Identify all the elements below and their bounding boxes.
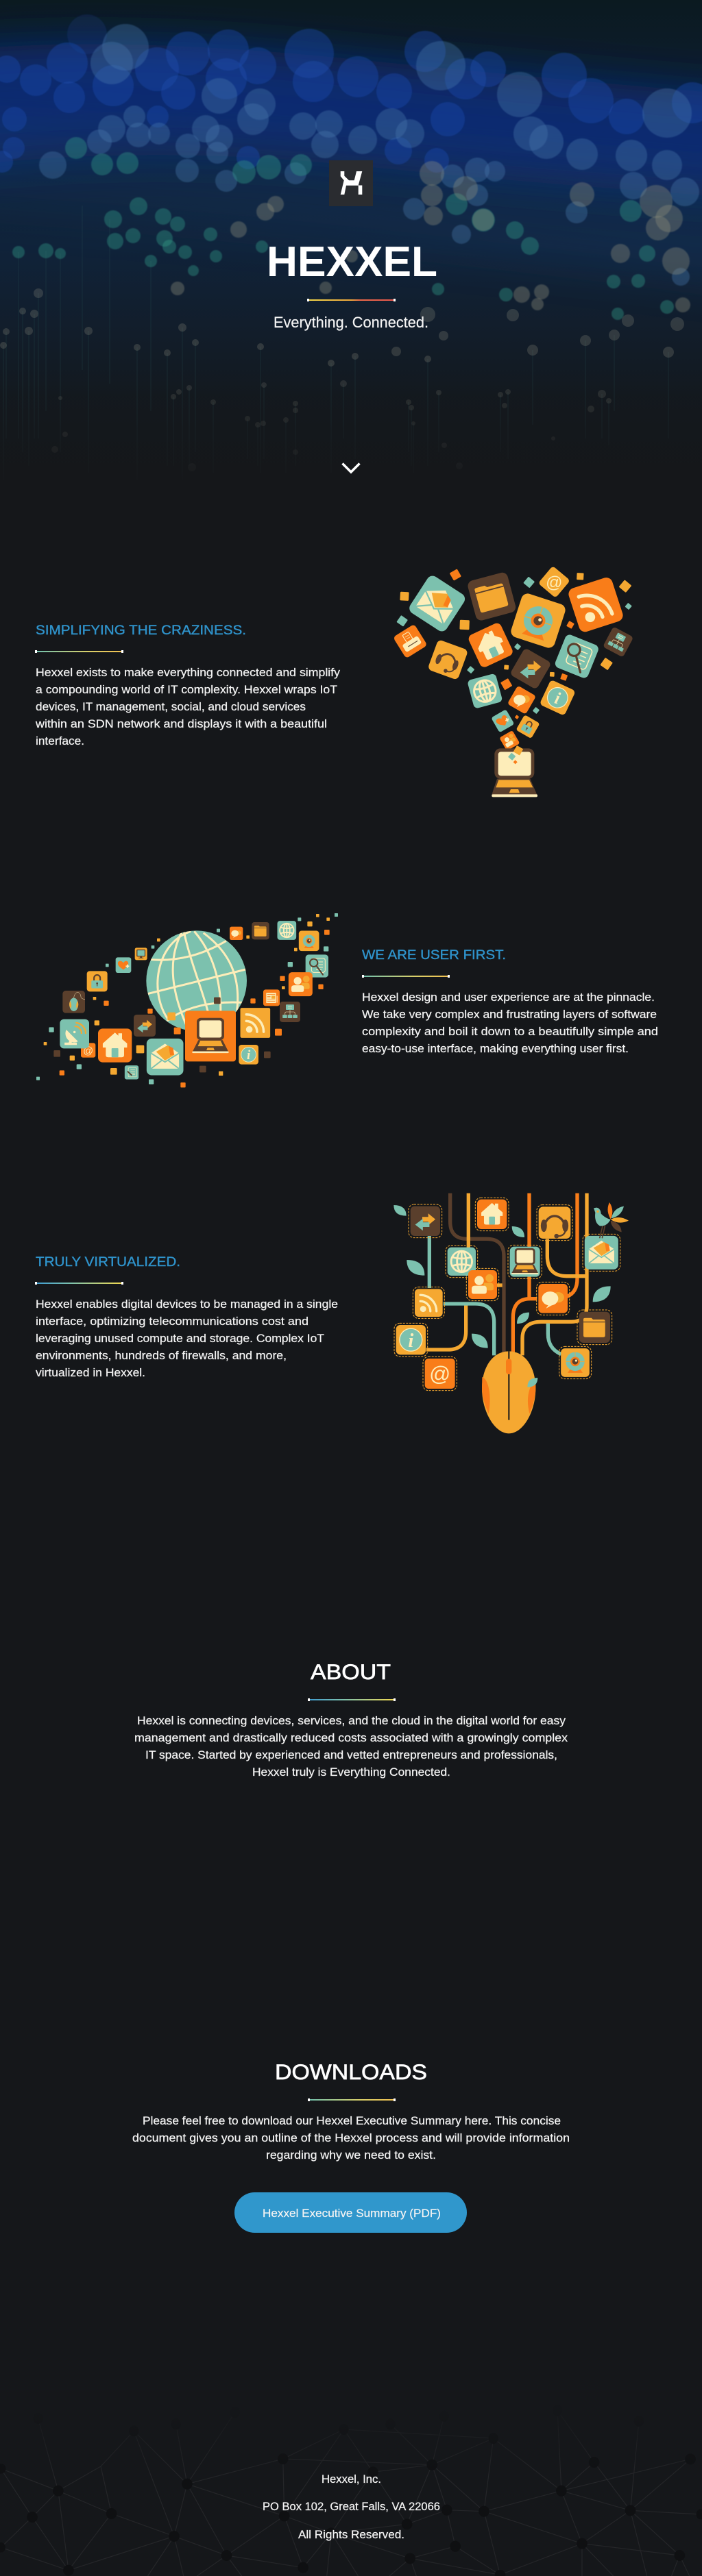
panel: hero fibre optic background [0,0,702,493]
tile: chat [230,927,243,940]
tile: printer [393,624,428,658]
footer network pattern [0,2370,702,2576]
body text: Hexxel enables digital devices to be managed in a single [36,1298,338,1311]
tile: at sign: @ [429,1363,450,1386]
tile: antenna [60,1019,89,1048]
icon: scroll-down chevron [343,463,359,472]
tile: folder [467,571,517,621]
panel: downloads [132,2059,570,2233]
body text [36,1298,338,1379]
tile: arrows [134,1015,156,1037]
connector cables [426,1193,587,1355]
body text [134,1715,568,1779]
body text: Hexxel truly is Everything Connected. [252,1766,450,1779]
tile: rss [240,1008,270,1038]
tile: headset [427,639,468,680]
footer text: All Rights Reserved. [298,2529,404,2541]
panel: truly virtualized [35,1254,338,1379]
body text [132,2115,570,2162]
tile: note [125,1065,138,1079]
icon: bird on envelope [594,1202,629,1238]
tile: heart [116,957,131,973]
panel: about [134,1659,568,1779]
tile: magnifier [306,954,328,978]
tile: globe [467,673,503,709]
illustration: mouse tree of connected apps [394,1193,629,1433]
heading: SIMPLIFYING THE CRAZINESS. [36,623,246,638]
body text: within an SDN network and displays it with a beautiful [35,718,327,730]
tile: envelope [585,1236,618,1270]
tile: envelope [147,1039,183,1075]
tile: users [468,1270,497,1299]
tile: info [396,1325,426,1354]
heading: TRULY VIRTUALIZED. [36,1254,180,1270]
body text: devices, IT management, social, and cloud services [36,701,306,713]
body text: Hexxel is connecting devices, services, and the cloud in the digital world for easy [137,1715,566,1727]
tile: headset [539,1206,570,1239]
tile: info: i [408,1330,413,1352]
button: executive summary PDF: Hexxel Executive Summary (PDF) [263,2207,441,2220]
divider: hero [307,299,396,301]
tile: folder [579,1312,610,1343]
tile: network [603,626,633,658]
tile: rss [567,576,625,634]
tile: folder [252,922,269,939]
body text: a compounding world of IT complexity. Hexxel wraps IoT [36,684,337,696]
tile: laptop [185,1011,236,1061]
tile: mouse [62,991,85,1013]
heading: WE ARE USER FIRST. [362,948,506,963]
tile: at sign: @ [83,1045,93,1056]
tile: info [540,680,576,716]
tile: webcam [561,1348,590,1377]
divider [35,1282,123,1285]
body text: document gives you an outline of the Hexxel process and will provide information [132,2132,570,2144]
tile: heart [491,709,514,732]
tile: laptop [510,1247,540,1277]
tile: lock [87,971,108,991]
divider [362,975,450,978]
tagline: Everything. Connected. [274,314,428,331]
body text [35,667,341,747]
illustration: apps flowing out of laptop [393,565,633,797]
divider [35,650,123,653]
tile: house [467,621,514,669]
body text: easy-to-use interface, making everything user first. [362,1043,629,1055]
heading: ABOUT [311,1659,391,1684]
tile: monitor [135,948,147,960]
globe [146,930,247,1031]
body text [362,991,658,1055]
body text: leveraging unused compute and storage. Complex IoT [36,1333,324,1345]
heading: DOWNLOADS [275,2059,427,2084]
icon: laptop [492,745,537,797]
tile: globe [277,921,296,940]
body text: complexity and boil it down to a beautifully simple and [362,1026,658,1038]
small floating squares [396,569,632,719]
tile: lock [516,715,540,739]
tile: webcam [299,930,319,951]
icon: Hexxel logo [329,160,373,206]
tile: users [499,730,520,751]
dashed tile outlines [394,1198,620,1391]
footer text [263,2473,440,2541]
body text: virtualized in Hexxel. [36,1367,145,1379]
body text: IT space. Started by experienced and vetted entrepreneurs and professionals, [145,1749,557,1761]
body text: management and drastically reduced costs associated with a growingly complex [134,1732,568,1744]
tile: house [98,1028,132,1063]
tile: info: i [247,1048,251,1063]
body text: We take very complex and frustrating layers of software [362,1008,657,1021]
divider [308,2098,396,2101]
panel: we are user first [362,948,658,1055]
tile: at sign [537,565,572,600]
title: HEXXEL [267,238,437,286]
panel: simplifying the craziness [35,623,341,747]
tile: network [280,1002,300,1022]
small floating squares [36,913,338,1087]
icon: computer mouse [482,1351,537,1433]
tile: arrows [411,1206,440,1236]
tile: magnifier [554,633,600,680]
divider [308,1698,396,1701]
button: executive summary PDF [234,2192,467,2233]
body text: Please feel free to download our Hexxel Executive Summary here. This concise [143,2115,561,2127]
tile: rss [415,1289,443,1317]
tile: envelope [407,573,467,634]
tile: at sign [81,1043,95,1058]
body text: interface. [36,735,84,747]
tile: info [239,1045,258,1065]
tile: chat [538,1284,568,1313]
tile: chat [507,685,536,715]
body text: environments, hundreds of firewalls, and more, [36,1350,287,1362]
tile: info: i [553,689,562,708]
footer text: Hexxel, Inc. [322,2473,381,2486]
tile: arrows [509,647,552,690]
tile: house [477,1200,507,1229]
body text: regarding why we need to exist. [266,2149,436,2162]
tile: globe [448,1248,476,1276]
tile: webcam [509,592,567,649]
body text: Hexxel exists to make everything connected and simplify [36,667,341,679]
body text: Hexxel design and user experience are at the pinnacle. [362,991,655,1004]
tile: at sign [425,1359,455,1389]
footer text: PO Box 102, Great Falls, VA 22066 [263,2501,440,2513]
illustration: globe with app icons [36,913,338,1087]
tile: at sign: @ [546,573,563,592]
tile: users [289,972,313,996]
body text: interface, optimizing telecommunications cost and [36,1315,308,1328]
leaves [394,1205,611,1348]
tile: news [263,989,280,1006]
